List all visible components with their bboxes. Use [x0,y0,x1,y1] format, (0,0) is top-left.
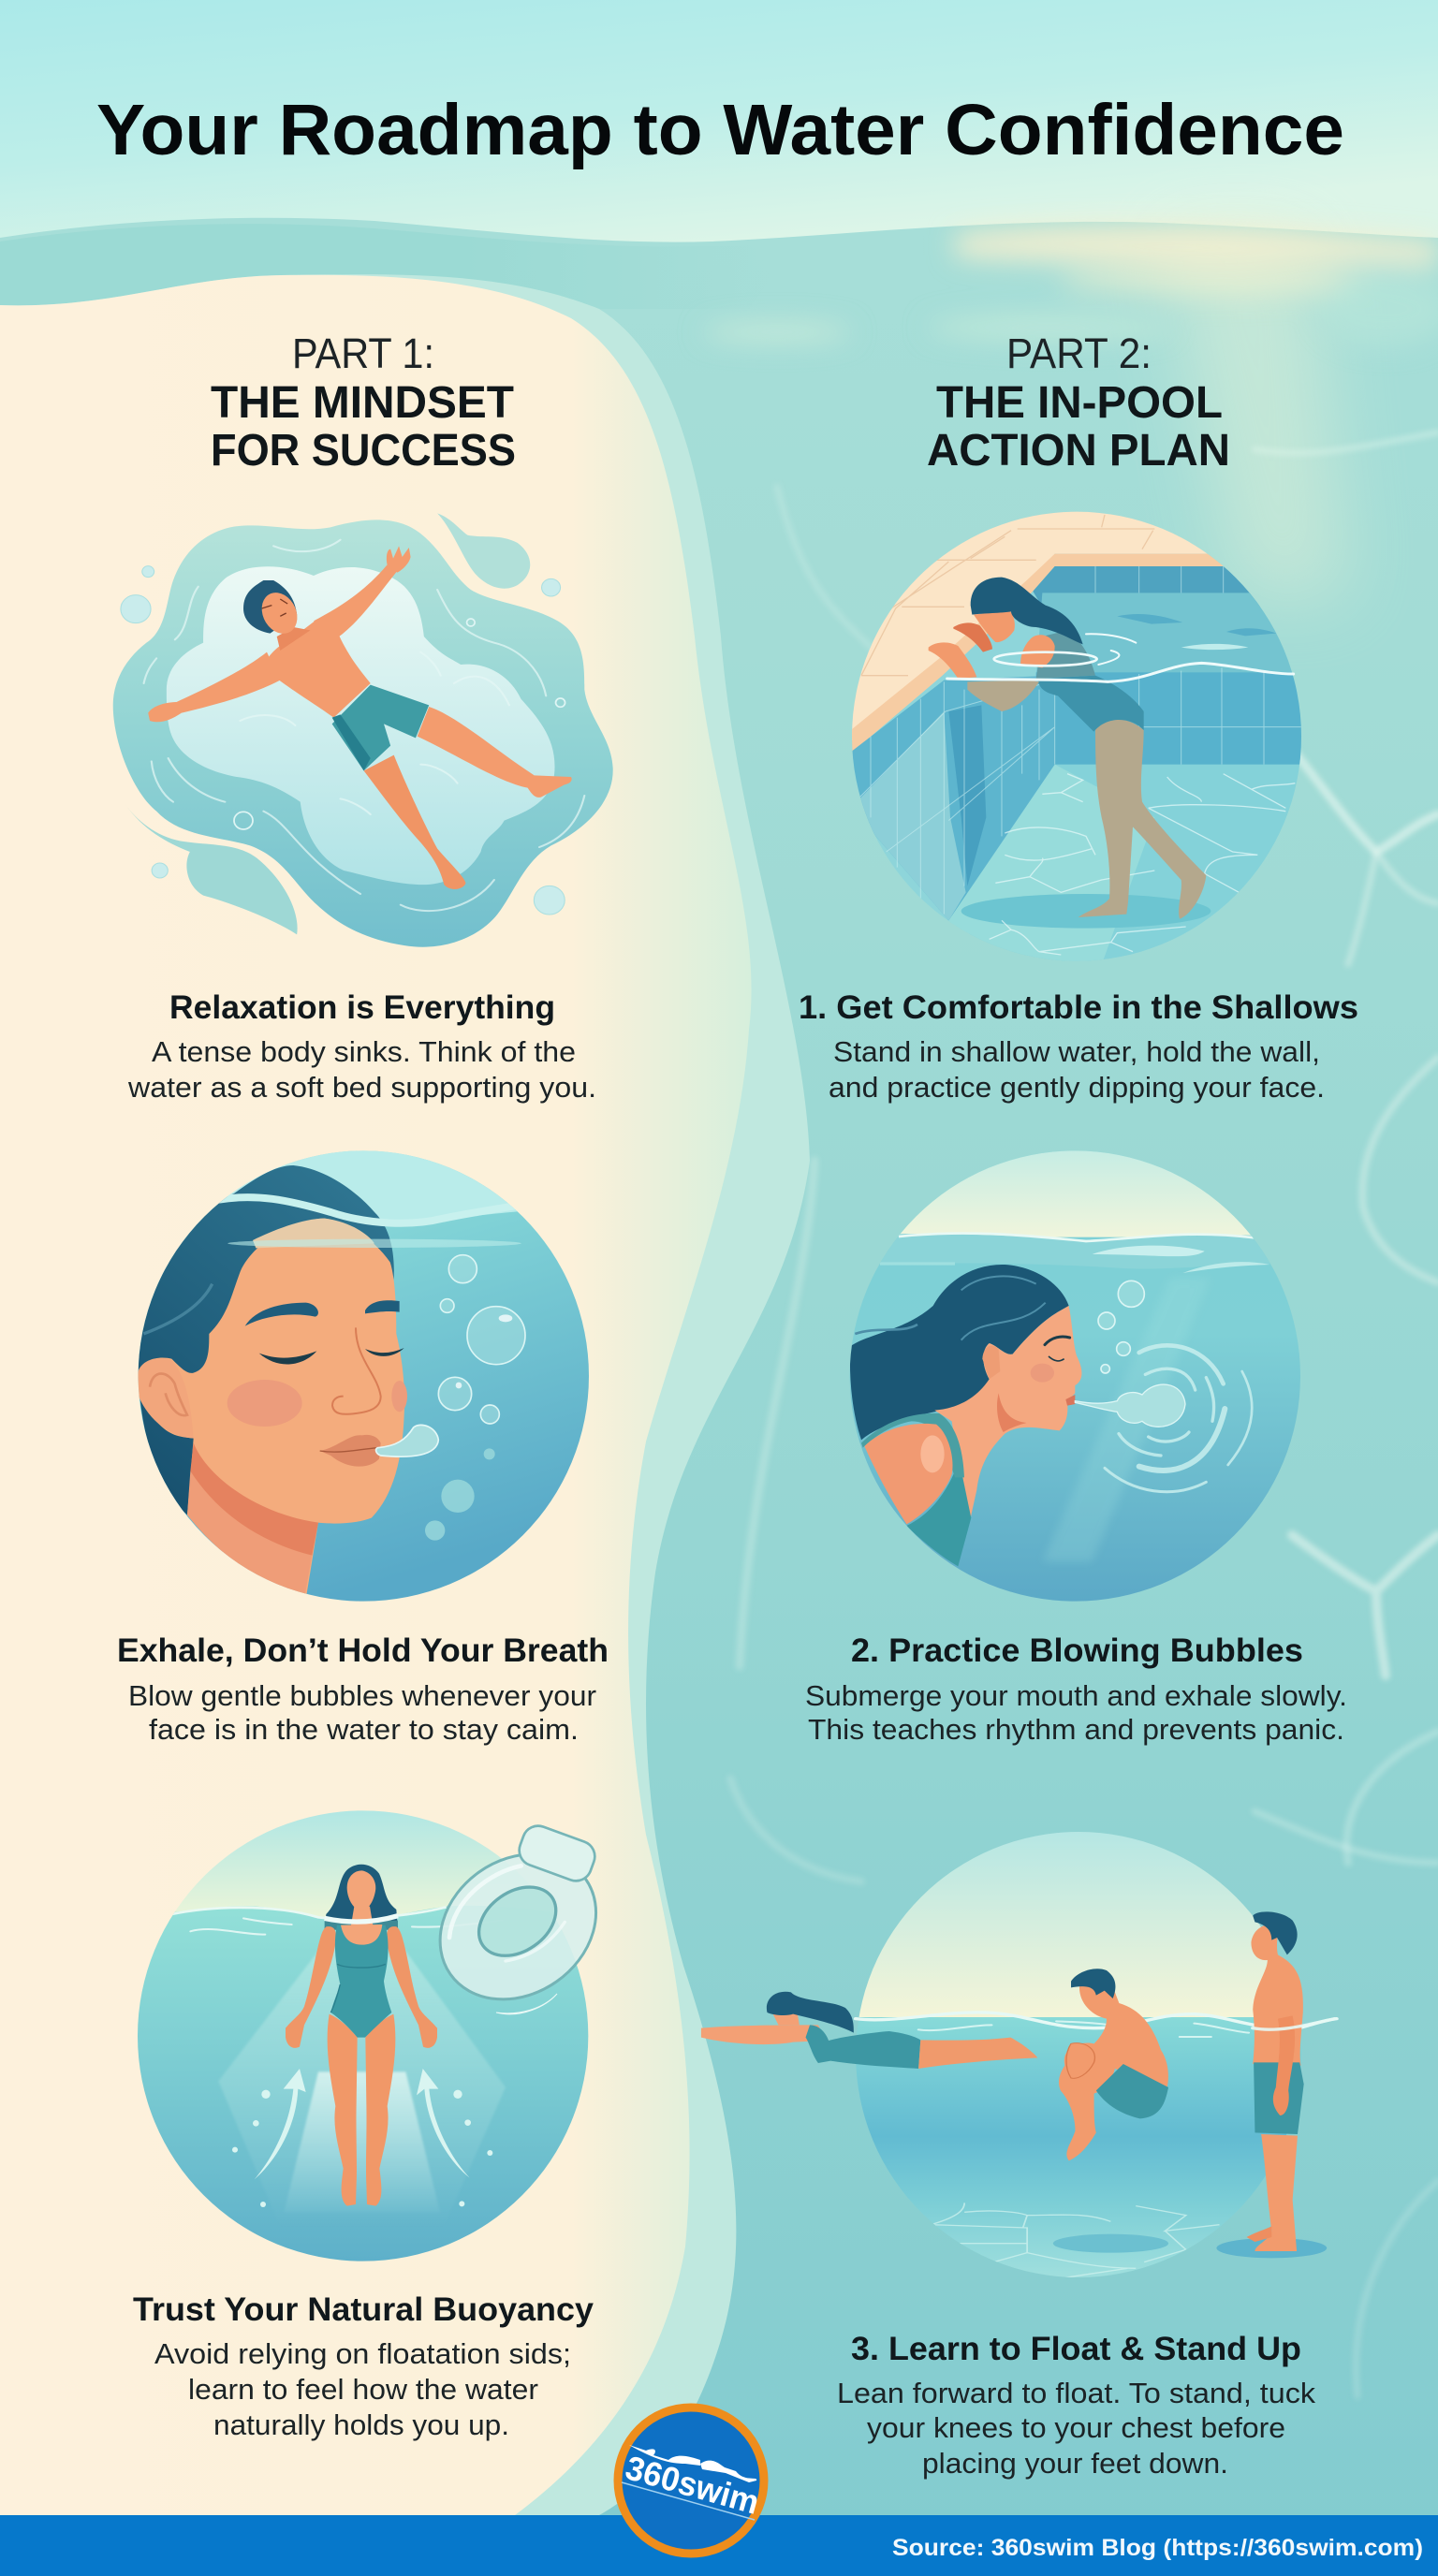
text: exhale: Blow gentle bubbles whenever your [128,1680,596,1712]
figure: swimmer tucking [1059,1969,1168,2160]
text: step 2 [805,1632,1347,1746]
text: step 2: Submerge your mouth and exhale slowly. [805,1680,1347,1712]
title: Your Roadmap to Water Confidence [96,90,1344,170]
icon: swim ring [412,1822,624,2029]
illustration: woman floating upright with swim ring [138,1810,597,2261]
heading: part 2: ACTION PLAN [927,426,1230,476]
text: buoyancy: naturally holds you up. [213,2409,509,2441]
text: relaxation [127,989,596,1104]
figure: man standing [1247,1911,1334,2251]
illustration: man floating on a water bed [113,513,613,947]
footer bar: Source: 360swim Blog (https://360swim.com) [892,2535,1423,2561]
text: step 3: your knees to your chest before [867,2412,1285,2444]
text: step 3: placing your feet down. [922,2448,1228,2480]
heading: part 2: THE IN-POOL [936,378,1223,428]
text: buoyancy: learn to feel how the water [188,2374,538,2406]
text: relaxation: Relaxation is Everything [169,989,555,1026]
footer bar [0,2515,1438,2576]
text: buoyancy [133,2291,594,2441]
illustration: woman blowing bubbles [843,1147,1311,1615]
text: step 1: 1. Get Comfortable in the Shallows [799,989,1358,1026]
text: exhale: Exhale, Don’t Hold Your Breath [117,1632,609,1669]
illustration: float, tuck and stand sequence [701,1825,1337,2282]
text: step 3: Lean forward to float. To stand, tuck [837,2378,1316,2409]
figure: swimmer floating [701,1992,1037,2069]
heading: part 2 [927,329,1230,476]
text: step 3: 3. Learn to Float & Stand Up [851,2331,1301,2367]
heading: part 2: PART 2: [1006,329,1152,377]
illustration: underwater face exhaling [131,1147,599,1615]
panel: cream left column [0,274,810,2515]
heading: part 1 [211,329,516,476]
text: step 2: 2. Practice Blowing Bubbles [851,1632,1303,1669]
text: relaxation: water as a soft bed supporting you. [127,1072,596,1104]
text: exhale [117,1632,609,1746]
text: step 1: Stand in shallow water, hold the wall, [833,1036,1320,1068]
text: relaxation: A tense body sinks. Think of the [152,1036,576,1068]
logo: 360swim badge [618,2408,764,2554]
text: step 2: This teaches rhythm and prevents panic. [808,1714,1344,1746]
text: step 1 [799,989,1358,1104]
text: buoyancy: Avoid relying on floatation sids; [154,2338,571,2370]
heading: part 1: PART 1: [292,329,434,377]
text: step 3 [837,2331,1316,2480]
heading: part 1: FOR SUCCESS [211,426,516,476]
text: step 1: and practice gently dipping your face. [829,1072,1325,1104]
illustration: woman dipping her face at the pool wall [843,505,1311,973]
text: buoyancy: Trust Your Natural Buoyancy [133,2291,594,2328]
text: exhale: face is in the water to stay caim. [149,1714,579,1746]
heading: part 1: THE MINDSET [211,378,514,428]
logo: 360swim badge: 360swim [622,2448,763,2522]
